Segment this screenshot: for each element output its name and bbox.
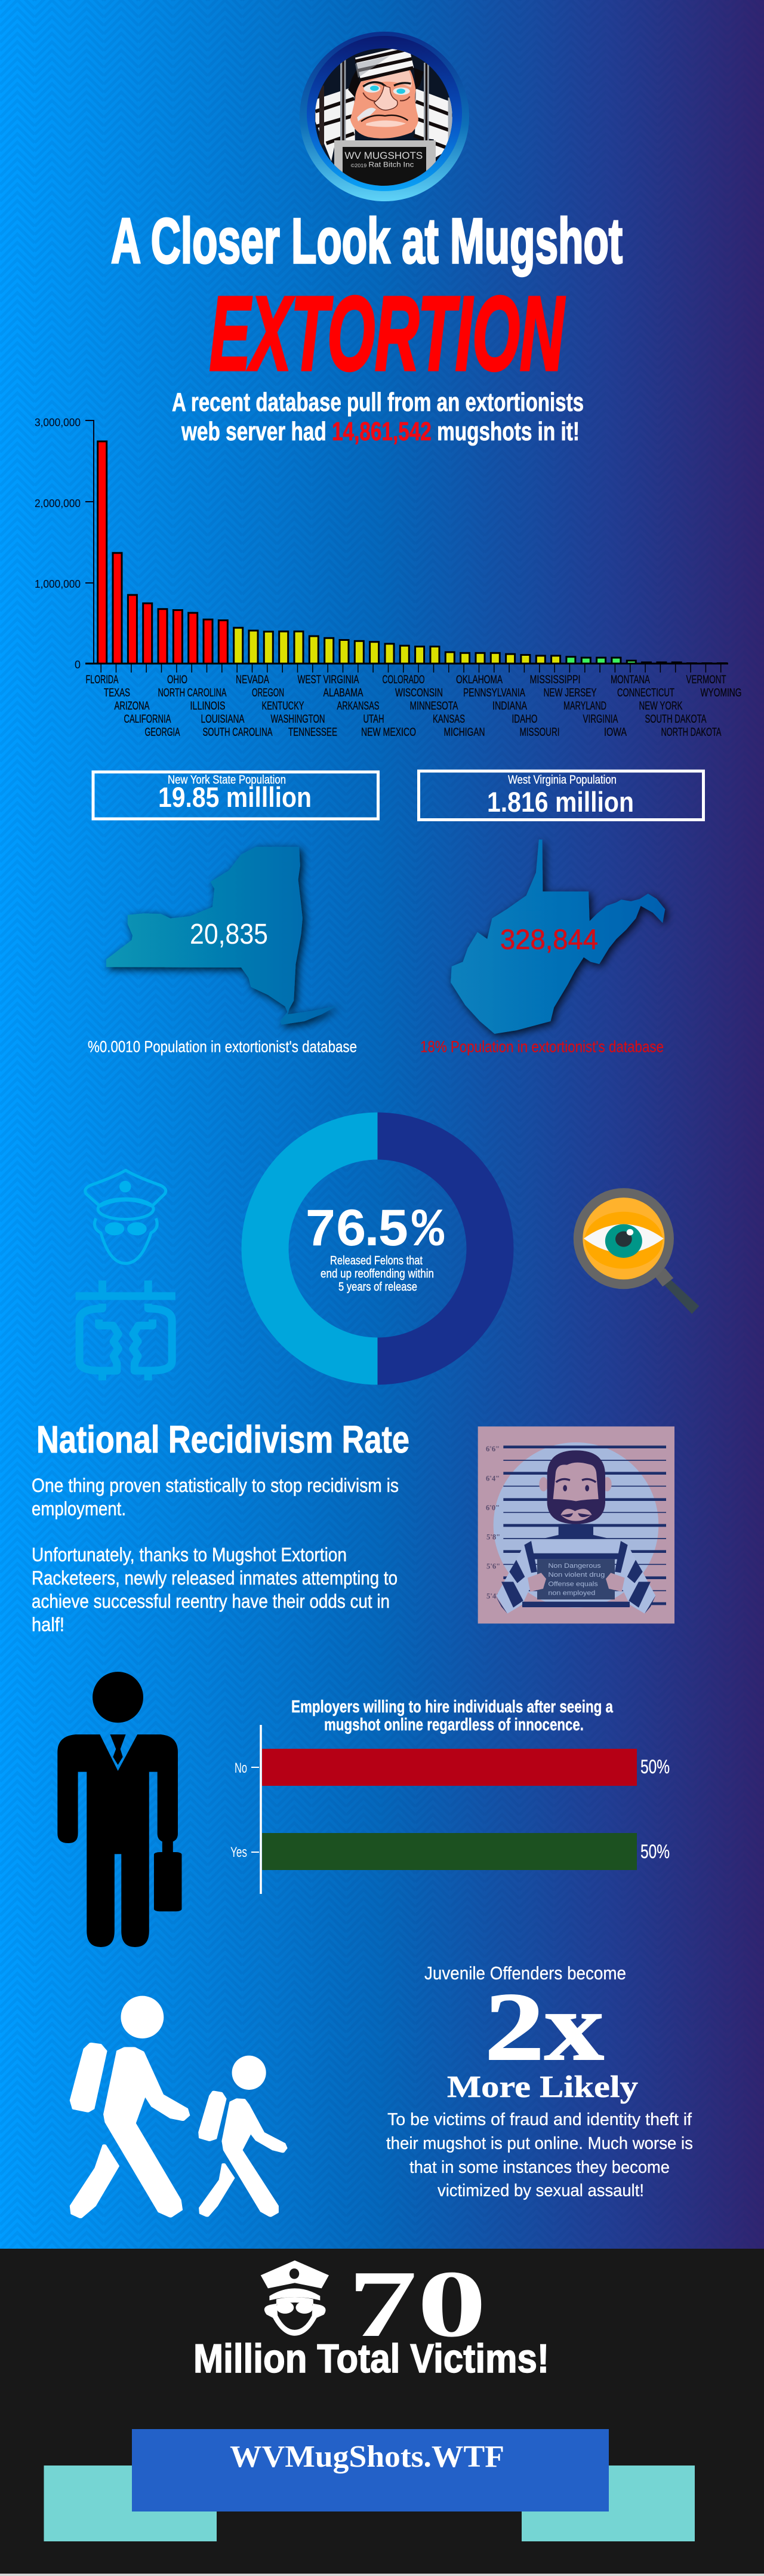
illustration: mugshot of inmate: 5'8": [486, 1533, 500, 1541]
donut chart: recidivism: Released Felons that: [330, 1254, 423, 1267]
panel: West Virginia population: 1.816 million: [487, 786, 634, 818]
state labels: ILLINOIS: [190, 700, 226, 713]
illustration: mugshot of inmate: 6'0": [486, 1503, 500, 1512]
bar: No: No: [235, 1760, 247, 1776]
state labels: WEST VIRGINIA: [297, 674, 359, 686]
state labels: NEW JERSEY: [543, 687, 597, 699]
state labels: [86, 674, 741, 739]
illustration: mugshot of inmate: 5'6": [486, 1562, 500, 1571]
intro text: web server had 14,861,542 mugshots in it!: [181, 417, 580, 446]
illustration: mugshot of inmate: 6'6": [486, 1445, 500, 1453]
state labels: MISSISSIPPI: [530, 674, 580, 686]
text block: recidivism body: employment.: [32, 1498, 126, 1519]
state labels: IDAHO: [512, 713, 537, 726]
donut chart: recidivism: [241, 1112, 513, 1384]
text block: recidivism body: half!: [32, 1614, 64, 1635]
text block: juvenile offenders: victimized by sexual assault!: [438, 2181, 644, 2200]
state labels: VIRGINIA: [583, 713, 618, 726]
text block: juvenile offenders: that in some instances they become: [409, 2158, 670, 2177]
state labels: ARIZONA: [115, 700, 150, 713]
state labels: NEVADA: [236, 674, 269, 686]
state labels: MARYLAND: [563, 700, 606, 713]
state labels: INDIANA: [492, 700, 527, 713]
state labels: ALABAMA: [324, 687, 363, 699]
panel: West Virginia population: [419, 771, 703, 819]
text block: recidivism body: Racketeers, newly released inmates attempting to: [32, 1567, 398, 1589]
text block: juvenile offenders: 2x: [485, 1973, 604, 2081]
state labels: UTAH: [363, 713, 384, 726]
donut chart: recidivism: end up reoffending within: [321, 1267, 434, 1281]
heading: National Recidivism Rate: National Recidivism Rate: [36, 1418, 409, 1461]
bar: Yes: 50%: [640, 1841, 670, 1862]
state labels: MICHIGAN: [444, 726, 485, 739]
logo: cartoon prisoner badge: WV MUGSHOTS: [344, 150, 423, 161]
y axis and labels: 3,000,000: [35, 417, 81, 429]
stat: 70: 70: [348, 2250, 486, 2357]
state labels: WASHINGTON: [271, 713, 325, 726]
bar: Yes: Yes: [230, 1844, 247, 1860]
bar chart: employers willing to hire: [230, 1697, 670, 1894]
caption: New York share: %0.0010 Population in extortionist's database: [88, 1038, 357, 1056]
state labels: WYOMING: [701, 687, 741, 699]
state labels: KANSAS: [433, 713, 465, 726]
icon: handcuffs: [76, 1281, 175, 1380]
state labels: TENNESSEE: [288, 726, 337, 739]
state labels: ARKANSAS: [337, 700, 380, 713]
state labels: IOWA: [604, 726, 627, 739]
panel: New York population: [93, 772, 378, 819]
state labels: SOUTH CAROLINA: [203, 726, 273, 739]
state labels: GEORGIA: [144, 726, 180, 739]
state labels: PENNSYLVANIA: [463, 687, 525, 699]
state labels: COLORADO: [382, 674, 425, 686]
illustration: mugshot of inmate: non employed: [548, 1589, 595, 1596]
state labels: TEXAS: [104, 687, 130, 699]
bar: No: 50%: [640, 1756, 670, 1777]
text block: recidivism body: achieve successful reentry have their odds cut in: [32, 1591, 390, 1612]
state labels: KENTUCKY: [261, 700, 304, 713]
illustration: mugshot of inmate: Non violent drug: [548, 1571, 605, 1579]
icon: adult and child walking: [72, 1996, 285, 2218]
bar chart: mugshots by state: [35, 417, 741, 739]
donut chart: recidivism: 5 years of release: [338, 1281, 417, 1294]
state labels: NEW YORK: [639, 700, 683, 713]
bar: Yes: [230, 1833, 670, 1870]
green bars: [566, 657, 636, 664]
donut chart: recidivism: 76.5%: [304, 1201, 445, 1262]
y axis and labels: [35, 417, 94, 671]
teal block right: [522, 2466, 695, 2541]
state labels: OHIO: [167, 674, 187, 686]
logo: cartoon prisoner badge: Rat Bitch Inc: [368, 160, 414, 168]
banner: website: [132, 2429, 609, 2511]
state labels: OKLAHOMA: [456, 674, 503, 686]
stat: New York count: 20,835: [190, 919, 268, 950]
logo: cartoon prisoner badge: [300, 32, 469, 201]
icon: businessman with briefcase: [57, 1672, 181, 1947]
intro text: A recent database pull from an extortionists: [172, 388, 584, 417]
state labels: NORTH DAKOTA: [661, 726, 722, 739]
state labels: WISCONSIN: [395, 687, 443, 699]
smallest bars: [641, 662, 728, 664]
state labels: NORTH CAROLINA: [158, 687, 227, 699]
y axis and labels: 2,000,000: [35, 498, 81, 509]
state labels: MINNESOTA: [409, 700, 458, 713]
state labels: VERMONT: [686, 674, 726, 686]
state labels: SOUTH DAKOTA: [645, 713, 707, 726]
state labels: MONTANA: [611, 674, 650, 686]
intro text: [172, 388, 584, 446]
stat: West Virginia count: 328,844: [500, 923, 598, 955]
text block: recidivism body: Unfortunately, thanks to Mugshot Extortion: [32, 1544, 347, 1565]
icon: magnifying glass with eye: [574, 1188, 699, 1314]
panel: New York population: New York State Population: [168, 773, 286, 787]
bar chart: employers willing to hire: mugshot online regardless of innocence.: [324, 1715, 584, 1734]
illustration: mugshot of inmate: Non Dangerous: [548, 1562, 601, 1570]
y axis and labels: 0: [75, 659, 81, 671]
text block: juvenile offenders: To be victims of fraud and identity theft if: [387, 2110, 692, 2129]
text block: juvenile offenders: More Likely: [447, 2070, 638, 2104]
state labels: OREGON: [252, 687, 284, 699]
panel: West Virginia population: West Virginia Population: [508, 773, 617, 787]
logo: cartoon prisoner badge: ©2019: [351, 163, 367, 168]
state labels: MISSOURI: [519, 726, 560, 739]
panel: New York population: 19.85 milllion: [158, 781, 312, 813]
text block: juvenile offenders: [386, 1963, 693, 2200]
text block: juvenile offenders: their mugshot is put online. Much worse is: [386, 2134, 693, 2153]
map: West Virginia: [451, 840, 665, 1034]
y axis and labels: 1,000,000: [35, 578, 81, 590]
text block: juvenile offenders: Juvenile Offenders become: [424, 1963, 626, 1984]
illustration: mugshot of inmate: 6'4": [486, 1474, 500, 1482]
illustration: mugshot of inmate: Offense equals: [548, 1580, 598, 1588]
state labels: CONNECTICUT: [617, 687, 674, 699]
illustration: mugshot of inmate: [478, 1426, 674, 1623]
state labels: NEW MEXICO: [361, 726, 416, 739]
illustration: mugshot of inmate: 5'4": [486, 1592, 500, 1601]
panel: footer: [0, 2249, 764, 2576]
red bars: [98, 441, 227, 664]
teal block left: [44, 2466, 217, 2541]
bar chart: employers willing to hire: Employers willing to hire individuals after seeing a: [291, 1697, 614, 1717]
caption: West Virginia share: 18% Population in extortionist's database: [420, 1038, 664, 1056]
map: New York: [106, 847, 337, 1025]
state labels: CALIFORNIA: [124, 713, 171, 726]
state labels: FLORIDA: [86, 674, 119, 686]
text block: recidivism body: One thing proven statistically to stop recidivism is: [32, 1475, 399, 1496]
state labels: LOUISIANA: [201, 713, 245, 726]
icon: police officer solid: [261, 2261, 329, 2336]
banner: website: WVMugShots.WTF: [230, 2440, 504, 2474]
heading: million total victims: Million Total Victims!: [193, 2336, 549, 2381]
bar: No: [235, 1749, 670, 1786]
yellow bars: [234, 628, 560, 664]
icon: police officer outline: [85, 1170, 166, 1263]
text block: recidivism body: [32, 1475, 399, 1635]
